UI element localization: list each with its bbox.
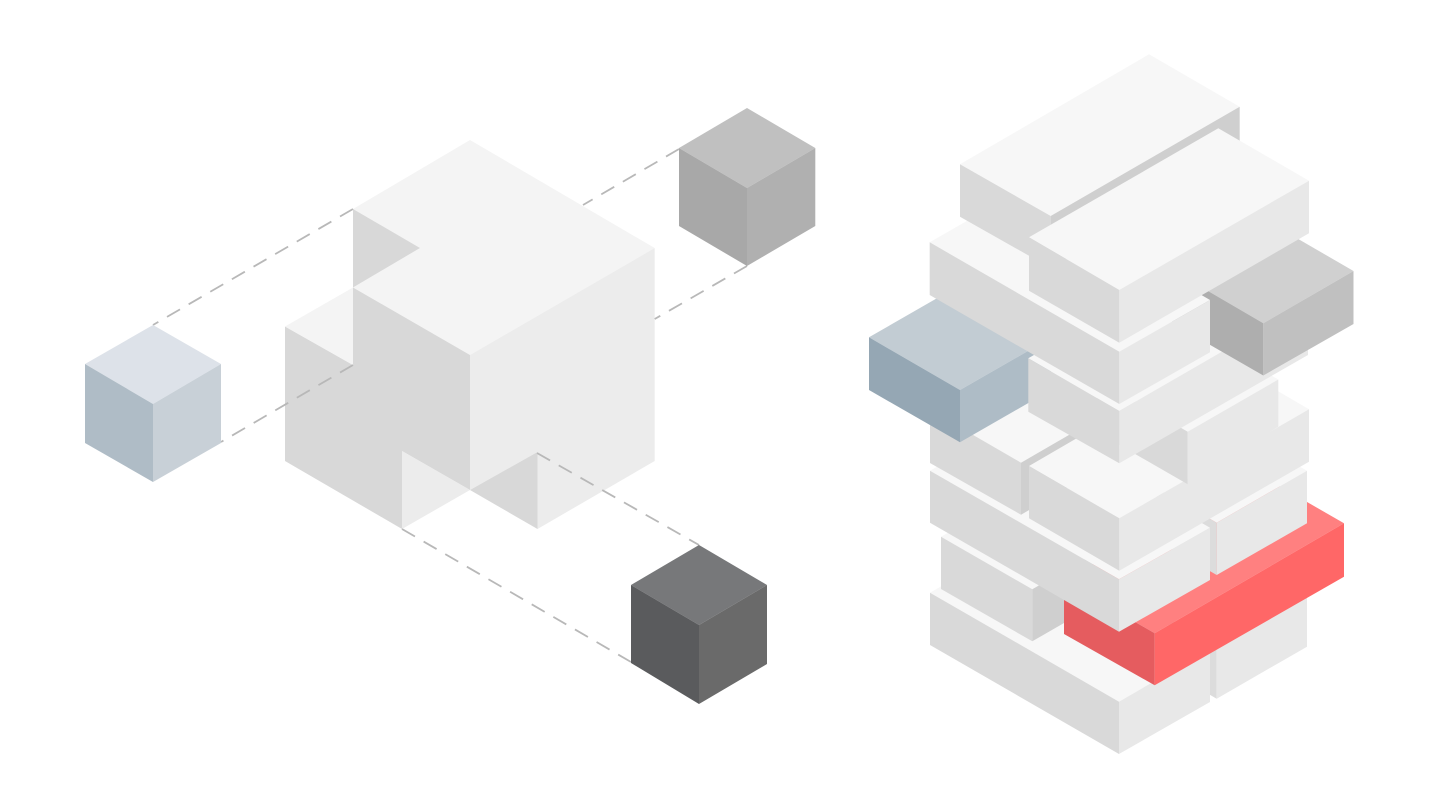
block tower: [869, 54, 1354, 754]
block: red highlighted: [1064, 471, 1344, 685]
large cube with three missing corner notches: [285, 140, 655, 529]
block: fourth layer long: [930, 418, 1210, 632]
block: blue: [869, 285, 1051, 442]
block: grey: [1172, 218, 1354, 376]
block: bottom right short: [1126, 594, 1307, 699]
block: fifth layer long: [1029, 356, 1309, 571]
block: top front long: [1029, 128, 1309, 343]
block: lower left short: [941, 484, 1123, 641]
block: sixth layer long: [1028, 250, 1308, 463]
block: middle right short: [1126, 418, 1307, 575]
block: fifth layer left short: [930, 358, 1112, 515]
block: seventh layer long: [930, 190, 1210, 404]
block: sixth layer right short: [1097, 327, 1278, 484]
dark cube: [631, 545, 767, 704]
block: bottom long: [930, 540, 1210, 754]
light blue cube: [85, 325, 221, 482]
grey cube: [679, 108, 815, 266]
block: top back long: [960, 54, 1240, 268]
dashed guide lines from cubes to notches: [153, 149, 747, 662]
